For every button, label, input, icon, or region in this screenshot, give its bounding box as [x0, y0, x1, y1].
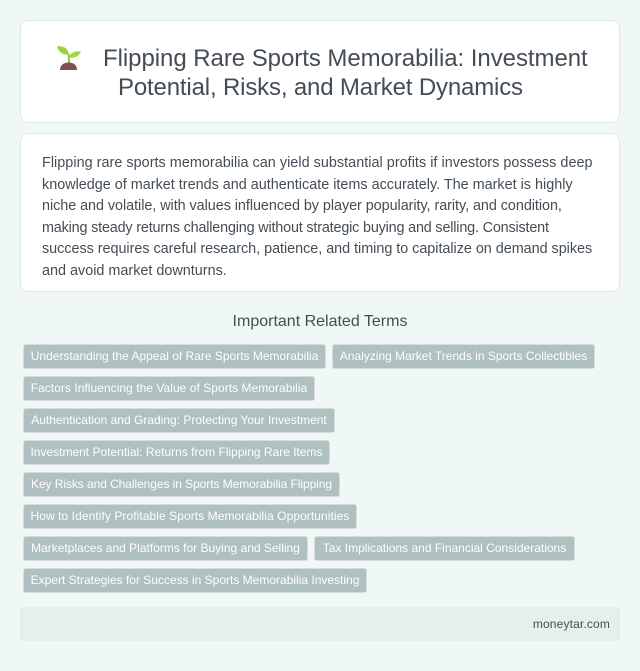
- intro text: [42, 155, 593, 279]
- tag list: Expert Strategies for Success in Sports Memorabilia Investing: [31, 573, 359, 587]
- heading: important related terms: Important Related Terms: [233, 313, 407, 330]
- intro text: Flipping rare sports memorabilia can yield substantial profits if investors possess deep: [42, 155, 593, 171]
- title: Flipping Rare Sports Memorabilia: Investment: [103, 45, 588, 72]
- footer: [20, 607, 620, 641]
- intro text: and avoid market downturns.: [42, 263, 227, 279]
- tag list: Tax Implications and Financial Considerations: [323, 541, 566, 555]
- tag list: Investment Potential: Returns from Flipping Rare Items: [30, 445, 323, 459]
- tag list: Understanding the Appeal of Rare Sports Memorabilia: [31, 349, 318, 363]
- icon: seedling: [57, 46, 81, 70]
- tag list: [23, 344, 595, 593]
- tag list: Key Risks and Challenges in Sports Memorabilia Flipping: [31, 477, 332, 491]
- intro text: making steady returns challenging without strategic buying and selling. Consistent: [42, 220, 549, 236]
- intro text: knowledge of market trends and authenticate items accurately. The market is highly: [42, 177, 573, 193]
- intro panel: [20, 133, 620, 292]
- title: [103, 45, 588, 101]
- intro text: success requires careful research, patience, and timing to capitalize on demand spikes: [42, 241, 592, 257]
- tag list: How to Identify Profitable Sports Memorabilia Opportunities: [31, 509, 349, 523]
- tag list: Analyzing Market Trends in Sports Collectibles: [340, 349, 587, 363]
- footer source: moneytar.com: [533, 617, 610, 631]
- intro text: niche and volatile, with values influenced by player popularity, rarity, and condition,: [42, 198, 562, 214]
- tag list: Marketplaces and Platforms for Buying and Selling: [31, 541, 300, 555]
- tag list: Authentication and Grading: Protecting Your Investment: [31, 413, 327, 427]
- title: Potential, Risks, and Market Dynamics: [118, 74, 523, 101]
- tag list: Factors Influencing the Value of Sports Memorabilia: [31, 381, 307, 395]
- header panel: [20, 20, 620, 123]
